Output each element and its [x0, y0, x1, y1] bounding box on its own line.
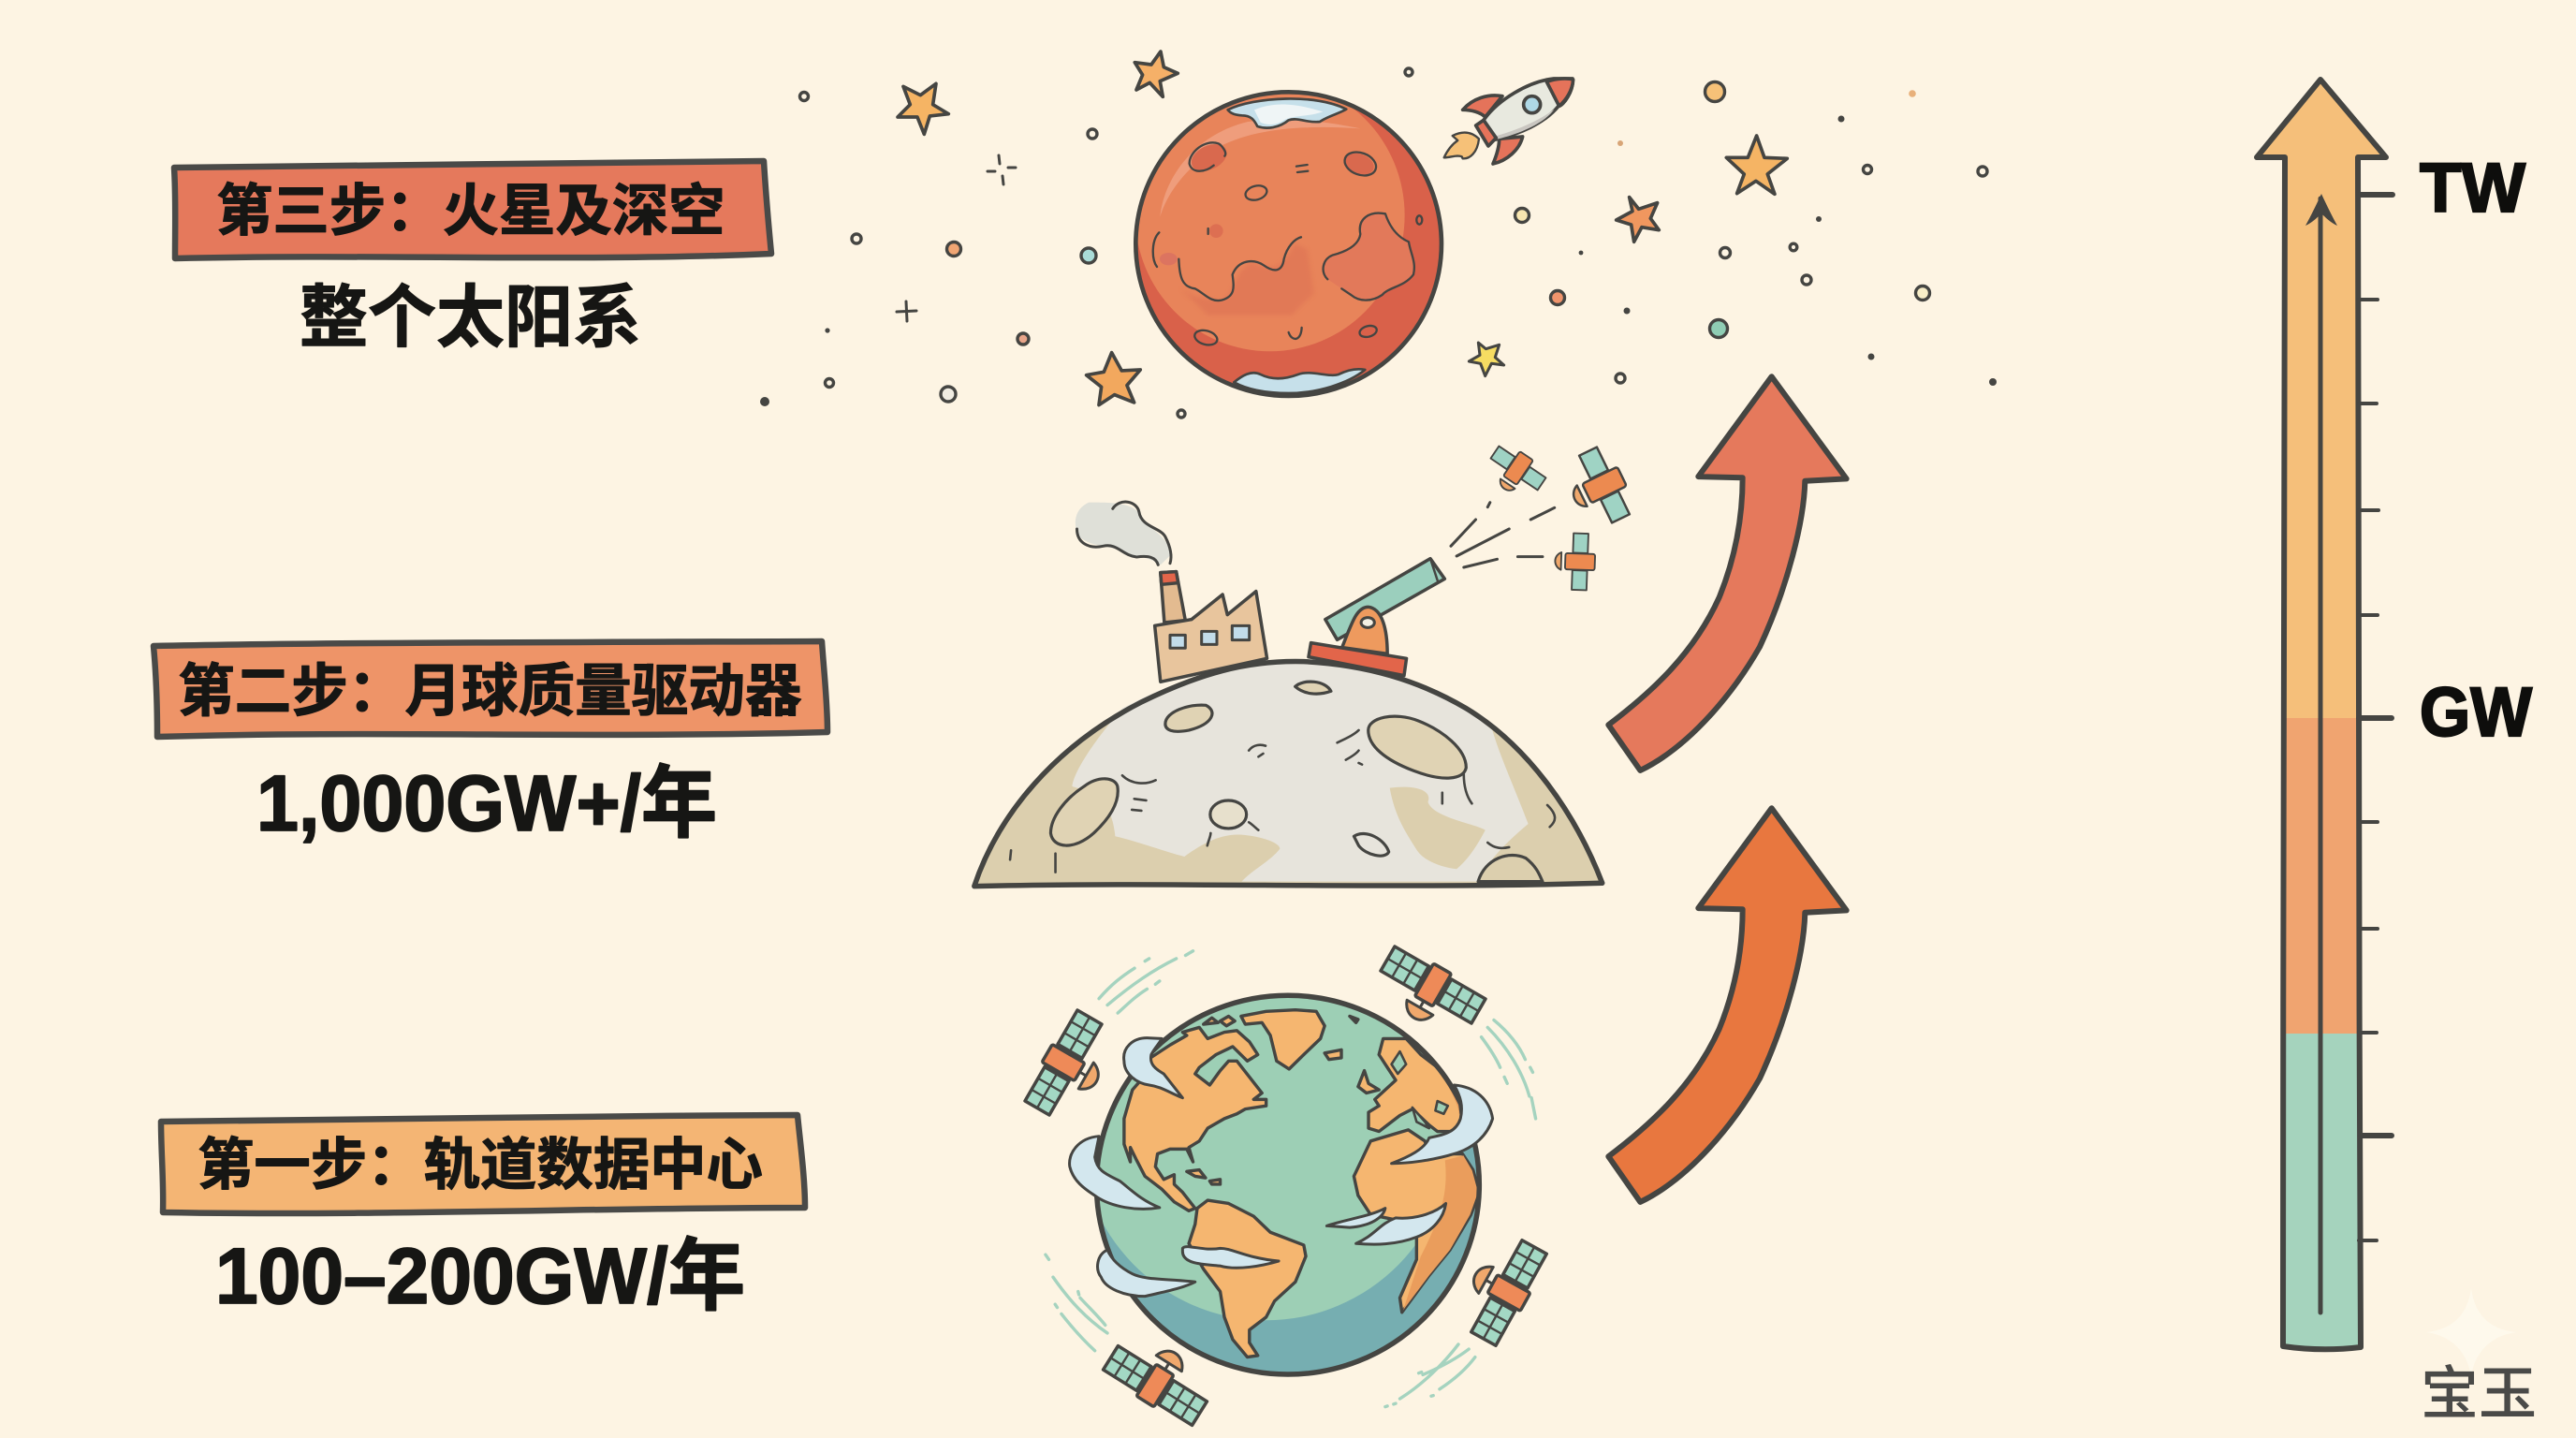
- inner arrow: [2318, 198, 2323, 1313]
- banner: step 1: [161, 1115, 805, 1213]
- satellite: [1559, 443, 1638, 533]
- icon: sparkle: [2426, 1288, 2516, 1376]
- tick marks: [2359, 300, 2378, 1240]
- moon light surface: [1072, 663, 1529, 882]
- icon: smoke: [1076, 502, 1171, 565]
- arrow: step 2 to step 3: [1608, 376, 1847, 770]
- value: step 2: 1,000GW+/年: [256, 759, 717, 847]
- starfield right of Mars: [1469, 82, 1997, 386]
- icon: mass driver cannon: [1309, 559, 1444, 676]
- text: author: 宝玉: [2421, 1362, 2537, 1427]
- earth outline: [1096, 995, 1479, 1374]
- launch streaks: [1451, 503, 1555, 567]
- icon: launched satellites: [1481, 440, 1638, 591]
- scale fill: lower range: [2284, 1034, 2361, 1348]
- star: [1469, 343, 1504, 376]
- continents: [1124, 1010, 1479, 1357]
- Africa: [1354, 1130, 1479, 1313]
- satellite: top left: [1021, 1008, 1122, 1127]
- south ice cap: [1234, 369, 1365, 393]
- satellite: bottom left: [1101, 1326, 1220, 1430]
- banner: step 3: [174, 161, 771, 258]
- South America: [1189, 1200, 1306, 1357]
- star: [1134, 51, 1178, 96]
- star: [1087, 353, 1140, 405]
- illustration: Moon with factory and mass driver: [974, 502, 1603, 887]
- Mars outline: [1135, 92, 1442, 396]
- heading: step 3: 第三步：火星及深空: [216, 179, 725, 242]
- satellite: bottom right: [1450, 1228, 1551, 1348]
- orbit lines: [1046, 951, 1536, 1407]
- icon: factory: [1155, 572, 1267, 682]
- craters: [1050, 682, 1543, 882]
- satellite: [1554, 533, 1596, 591]
- chart: energy scale arrow: [2257, 80, 2532, 1349]
- value: step 3: 整个太阳系: [300, 280, 641, 356]
- panel: step 2 label: [154, 641, 827, 847]
- scale fill: TW range: [2258, 81, 2385, 718]
- surface marks: [1010, 730, 1555, 873]
- arrow: step 1 to step 2: [1608, 808, 1847, 1202]
- heading: step 1: 第一步：轨道数据中心: [198, 1133, 763, 1196]
- starfield left of Mars: [760, 51, 1412, 418]
- panel: step 3 label: [174, 161, 771, 356]
- watermark: [2421, 1288, 2537, 1427]
- star: [1726, 136, 1787, 194]
- Mars surface outlines: [1153, 142, 1422, 347]
- illustration: Mars: [1135, 80, 1442, 396]
- north ice cap: [1228, 98, 1346, 128]
- icon: orbiting satellites: [1021, 943, 1551, 1430]
- panel: step 1 label: [161, 1115, 805, 1320]
- satellite: top right: [1368, 943, 1487, 1044]
- star: [898, 83, 948, 134]
- ice highlight: [1254, 105, 1323, 125]
- icon: rocket: [1444, 79, 1573, 164]
- axis label: TW: TW: [2420, 149, 2525, 227]
- value: step 1: 100–200GW/年: [215, 1232, 745, 1320]
- shaded land east: [1403, 1155, 1478, 1310]
- heading: step 2: 第二步：月球质量驱动器: [178, 659, 802, 723]
- moon beige patch: [1390, 787, 1486, 869]
- banner: step 2: [154, 641, 827, 737]
- axis label: GW: GW: [2420, 673, 2532, 751]
- clouds: [1070, 1038, 1493, 1297]
- star: [1617, 198, 1659, 242]
- North America: [1124, 1027, 1266, 1211]
- illustration: Earth: [1046, 936, 1536, 1407]
- Greenland: [1241, 1010, 1325, 1069]
- islands: [1204, 1016, 1379, 1093]
- Eurasia: [1368, 1038, 1462, 1132]
- moon outline: [974, 662, 1603, 887]
- scale fill: GW range: [2284, 718, 2359, 1034]
- scale outline: [2257, 80, 2386, 1349]
- moon body: [974, 662, 1603, 887]
- satellite: [1481, 440, 1550, 505]
